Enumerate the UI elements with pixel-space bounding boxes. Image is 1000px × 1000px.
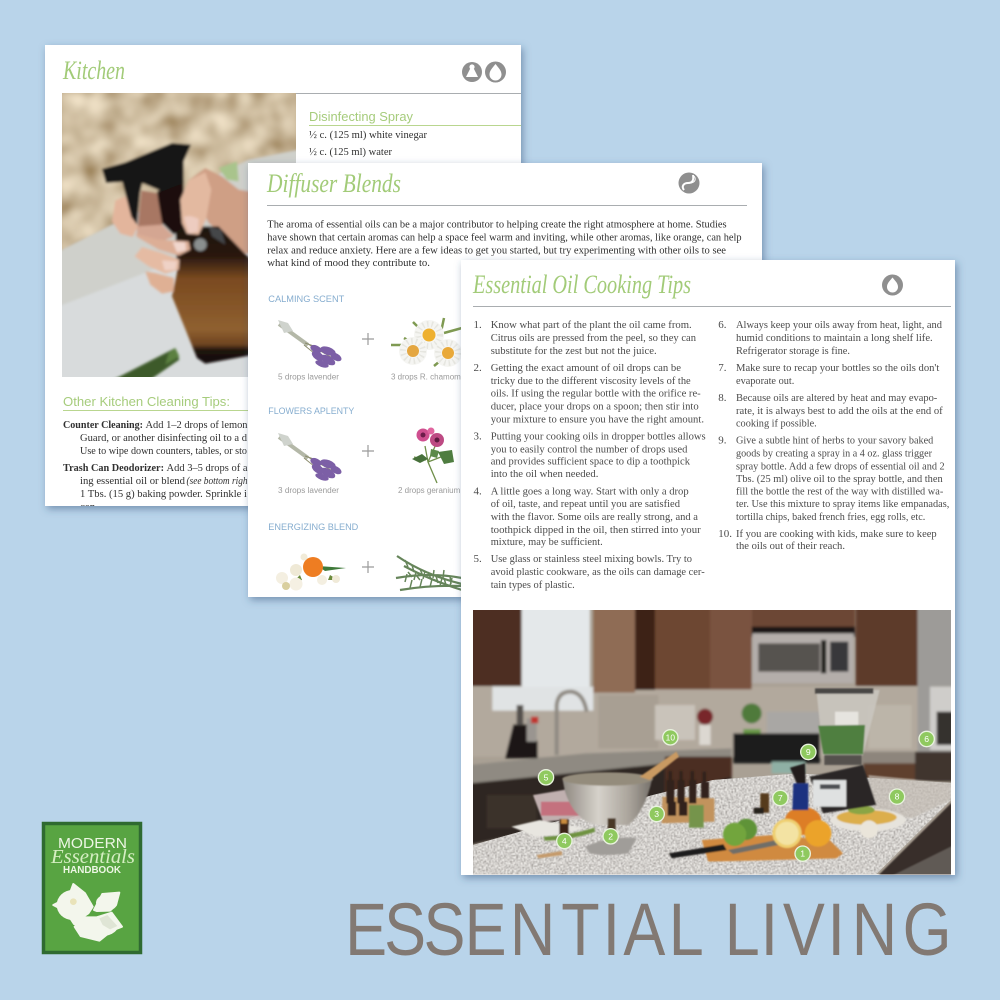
tips list: left column: Use glass or stainless steel mixing bowls. Try to (491, 553, 692, 565)
tips list: left column: with the flavor. Some oils are really strong, and a (491, 511, 698, 523)
tips list: left column: avoid plastic cookware, as the oils can damage cer- (491, 566, 705, 578)
marker 1: 1 (800, 849, 805, 859)
tips list: right column: 8. (718, 392, 727, 404)
stove (767, 712, 820, 735)
icon: plus (362, 561, 374, 573)
caption: geranium drops: 2 drops geranium (398, 486, 461, 495)
tips list: right column: Tbs. (25 ml) olive oil to the spray bottle, and then (736, 473, 943, 485)
tips list: right column: tortilla chips, baked french fries, egg rolls, etc. (736, 511, 926, 523)
neck (157, 180, 184, 235)
tips list: left column: Citrus oils are pressed from the peel, so they can (491, 332, 696, 344)
microwave (752, 633, 854, 683)
cleaning tips text: Add 3–5 drops of a (166, 462, 248, 474)
index finger (180, 172, 211, 235)
upper cabinets (470, 607, 522, 686)
tips list: left column: toothpick dipped in the oil, then stirred into your (491, 524, 701, 536)
thumb (112, 196, 138, 237)
cleaning tips text: Add 1–2 drops of lemon (146, 419, 248, 431)
lemon half (772, 819, 802, 848)
tips list: left column: tain types of plastic. (491, 579, 575, 591)
faucet, knife block, decor (557, 692, 587, 755)
refrigerator (918, 607, 954, 772)
heading: Diffuser Blends: Diffuser Blends (266, 169, 401, 198)
tips list: left column: A little goes a long way. Start with only a drop (491, 486, 689, 498)
tips list: right column: cooking if possible. (736, 418, 817, 430)
label: energizing blend: ENERGIZING BLEND (268, 522, 359, 532)
marker 4: 4 (562, 836, 567, 846)
heading: Kitchen: Kitchen (62, 56, 125, 85)
cleaning tips text: Use to wipe down counters, tables, or sto (80, 445, 247, 457)
cleaning tips text: Guard, or another disinfecting oil to a d (80, 432, 247, 444)
tips list: left column: tricky due to the different viscosity levels of the (491, 375, 691, 387)
cutting board (702, 835, 843, 862)
oil bottles in tray (662, 797, 714, 823)
marker 7: 7 (778, 793, 783, 803)
intro paragraph: The aroma of essential oils can be a major contributor to helping create the right atmosphere at home. Studies (267, 218, 727, 230)
intro paragraph: what kind of mood they contribute to. (267, 257, 430, 269)
tips list: right column: Refrigerator storage is fine. (736, 345, 850, 357)
plate of food (830, 809, 906, 831)
icon: plus (362, 333, 374, 345)
tips list: left column: ducer, place your drops on a spoon; then stir into (491, 400, 699, 412)
marker 10 (663, 730, 678, 745)
tips list: left column: 5. (474, 553, 482, 565)
tips list: right column: Make sure to recap your bottles so the oils don't (736, 362, 939, 374)
back of hand (192, 168, 248, 256)
cleaning tips text: (see bottom righ (186, 475, 248, 487)
cleaning tips text: 1 Tbs. (15 g) baking powder. Sprinkle i (80, 488, 247, 500)
marker 8 (889, 789, 905, 804)
tips list: right column: Because oils are altered by heat and may evapo- (736, 392, 938, 404)
intro paragraph: relax and reduce anxiety. Here are a few ideas to get you started, but try experimenting with other oils to see (267, 244, 726, 256)
wall and backsplash (470, 687, 920, 757)
blender (816, 690, 880, 755)
cleaning tips text: Counter Cleaning: (63, 419, 143, 431)
marker 4 (557, 833, 572, 849)
tips list: right column: fill the bottle the rest of the way with distilled wa- (736, 486, 944, 498)
icon: flask badge (462, 62, 482, 82)
marker 3: 3 (654, 809, 659, 819)
tips list: left column: 1. (474, 319, 482, 331)
intro paragraph: have shown that certain aromas can help a space feel warm and inviting, while other aromas, like orange, can help (267, 232, 742, 244)
tips list: left column: 2. (474, 362, 482, 374)
recipe text: ½ c. (125 ml) water (309, 146, 392, 158)
back counter (470, 748, 732, 783)
icon: plus (362, 445, 374, 457)
tips list: right column: If you are cooking with kids, make sure to keep (736, 528, 937, 540)
heading: Disinfecting Spray: Disinfecting Spray (309, 109, 413, 124)
logo: Modern Essentials Handbook: Essentials (50, 846, 135, 868)
marker 8: 8 (895, 792, 900, 802)
title: Essential Living: ESSENTIAL LIVING (345, 888, 952, 971)
icon: lavender (278, 320, 343, 369)
caption: chamomile drops: 3 drops R. chamomile (391, 372, 469, 382)
tips list: left column: and provides sufficient space to dip a toothpick (491, 456, 690, 468)
tips list: right column: 9. (718, 434, 727, 446)
tips list: right column: the oils out of their reach. (736, 540, 845, 552)
tips list: right column: spray bottle. Add a few drops of essential oil and 2 (736, 460, 945, 472)
tips list: left column: substitute for the zest but not the juice. (491, 345, 657, 357)
icon: citrus blossoms (276, 554, 346, 590)
intro paragraph (267, 218, 742, 269)
tips list: left column: into the oil when needed. (491, 468, 599, 480)
tips list: right column: evaporate out. (736, 375, 795, 387)
cleaning tips text: can (80, 501, 96, 513)
tips list: left column: oils. If using the regular bottle with the orifice re- (491, 388, 701, 400)
tips list: right column: goods by creating a spray in a 4 oz. glass trigger (736, 448, 932, 460)
bottle body (170, 224, 248, 366)
icon: rosemary (396, 556, 462, 590)
marker 6: 6 (924, 734, 929, 744)
tips list: left column: 4. (474, 486, 482, 498)
tips list: right column: Give a subtle hint of herbs to your savory baked (736, 434, 934, 446)
towel and herbs (511, 820, 585, 837)
numbered markers (538, 730, 934, 861)
icon: lavender (278, 433, 343, 482)
tips list: right column: Always keep your oils away from heat, light, and (736, 319, 942, 331)
cleaning tips text: ing essential oil or blend (80, 475, 185, 487)
tips list: left column (474, 319, 706, 591)
island countertop (473, 773, 951, 874)
marker 9: 9 (806, 747, 811, 757)
recipe text: ½ c. (125 ml) white vinegar (309, 129, 427, 141)
cleaning tips text (63, 419, 248, 513)
label: flowers aplenty: FLOWERS APLENTY (268, 406, 354, 416)
marker 5: 5 (544, 772, 549, 782)
label: calming scent: CALMING SCENT (268, 294, 345, 304)
icon: oil drop badge (485, 62, 506, 82)
heading: Essential Oil Cooking Tips: Essential Oil Cooking Tips (472, 270, 691, 299)
tips list: right column: 7. (718, 362, 727, 374)
lemon (805, 820, 831, 847)
tips list: left column: mixture, may be sufficient. (491, 536, 603, 548)
third finger (135, 247, 179, 274)
tips list: right column: 6. (718, 319, 727, 331)
icon: swirl badge (678, 172, 700, 194)
icon: white flowers (53, 884, 122, 941)
cleaning tips text: Trash Can Deodorizer: (63, 462, 164, 474)
marker 2 (603, 829, 618, 844)
marker 1 (795, 846, 810, 861)
logo: Modern Essentials Handbook: HANDBOOK (63, 865, 122, 876)
panel: cooking tips page (461, 260, 955, 878)
marker 6 (919, 731, 934, 747)
marker 3 (649, 806, 664, 822)
sprayer head (102, 143, 191, 191)
tips list: right column: rate, it is always best to add the oils at the end of (736, 405, 943, 417)
knife (669, 844, 727, 858)
marker 5 (538, 770, 554, 785)
small bottles and dish (559, 819, 569, 842)
marker 7 (773, 790, 788, 806)
icon: oil drop badge (882, 274, 903, 296)
inner hand shadow (136, 190, 164, 228)
logo: Modern Essentials Handbook (44, 824, 140, 952)
tips list: left column: your mixture to ensure you have the right amount. (491, 414, 704, 426)
limes (736, 819, 757, 840)
icon: geranium (412, 428, 454, 483)
blue spray bottle (792, 783, 808, 810)
panel: diffuser blends page (248, 163, 762, 597)
tips list: left column: 3. (474, 430, 482, 442)
tips list: left column: of oil, taste, and repeat until you are satisfied (491, 498, 680, 510)
icon: chamomile flowers (391, 318, 462, 367)
fourth finger (145, 271, 174, 294)
marker 2: 2 (608, 831, 613, 841)
tips list: right column: humid conditions to maintain a long shelf life. (736, 332, 933, 344)
trigger (122, 180, 143, 225)
tips list: left column: you to easily control the number of drops used (491, 444, 688, 456)
second finger (135, 234, 190, 256)
recipe text (309, 129, 427, 158)
heading: Other Kitchen Cleaning Tips: Other Kitchen Cleaning Tips: (63, 394, 230, 409)
tips list: left column: Know what part of the plant the oil came from. (491, 319, 692, 331)
measuring cup (533, 787, 583, 822)
tips list: right column: ter. Use this mixture to spray items like empanadas, (736, 498, 950, 510)
photo: hand holding spray bottle (59, 90, 299, 380)
marker 9 (801, 744, 816, 760)
logo: Modern Essentials Handbook: MODERN (58, 836, 127, 852)
caption: 3 drops lavender: 3 drops lavender (278, 486, 339, 495)
tips list: left column: Getting the exact amount of oil drops can be (491, 362, 681, 374)
orange (785, 807, 821, 835)
wooden spoon (640, 752, 679, 780)
tips list: left column: Putting your cooking oils in dropper bottles allows (491, 430, 706, 442)
marker 10: 10 (666, 732, 675, 742)
panel: kitchen page (45, 45, 521, 513)
photo: kitchen counter with numbered markers (470, 607, 954, 878)
tips list: right column (718, 319, 950, 552)
tips list: right column: 10. (718, 528, 732, 540)
caption: 5 drops lavender: 5 drops lavender (278, 372, 339, 382)
mixing bowl (562, 778, 652, 825)
lower cabinets (470, 757, 732, 845)
